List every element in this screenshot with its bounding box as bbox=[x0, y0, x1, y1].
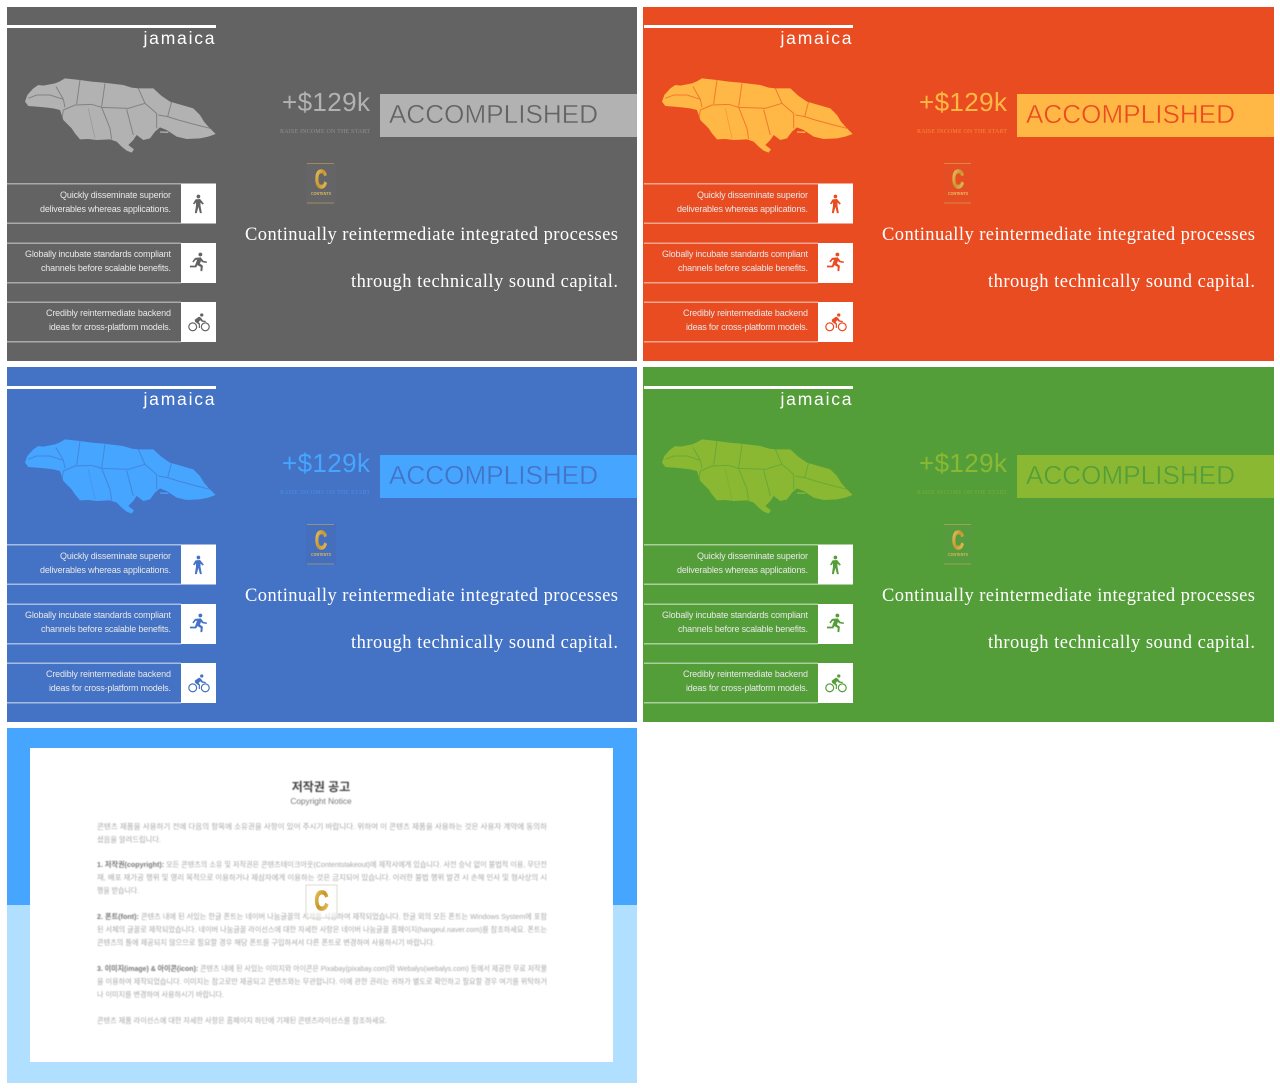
feature row: running bbox=[7, 604, 216, 644]
feature row: running: channels before scalable benefits. bbox=[678, 624, 808, 634]
icon: logo: C bbox=[952, 525, 964, 555]
text block: copyright clause bbox=[97, 860, 547, 895]
feature row: running bbox=[644, 604, 853, 644]
stat: +$129k: RAISE INCOME ON THE START bbox=[280, 490, 370, 496]
title: jamaica bbox=[644, 386, 853, 409]
banner: accomplished: ACCOMPLISHED bbox=[389, 460, 598, 490]
panel: green slide bbox=[643, 367, 1274, 722]
text block: font clause bbox=[97, 912, 547, 947]
feature row: cycling: ideas for cross-platform models. bbox=[686, 322, 808, 332]
heading: copyright notice: Copyright Notice bbox=[290, 796, 352, 806]
text block: image clause: 3. 이미지(image) & 아이콘(icon): 콘텐츠 내에 된 사있는 이미지와 아이콘은 Pixabay(pixabay.com)와 Webalys(webalys.com) 등에서 제공한 무료 저작물 bbox=[97, 964, 547, 973]
icon: logo: C bbox=[315, 164, 327, 194]
tagline: through technically sound capital. bbox=[351, 633, 618, 653]
map of Jamaica bbox=[662, 439, 853, 514]
panel: blue slide bbox=[7, 367, 637, 722]
map of Jamaica bbox=[25, 78, 216, 153]
icon: logo bbox=[306, 885, 337, 918]
panel: gray slide bbox=[7, 7, 637, 361]
title: jamaica bbox=[7, 25, 216, 48]
text block: intro: 콘텐츠 제품을 사용하기 전에 다음의 항목에 소유권을 사항이 있어 주시기 바랍니다. 위하여 이 콘텐츠 제품을 사용하는 것은 사용자 계약에 동의하 bbox=[97, 822, 547, 831]
stat: +$129k: RAISE INCOME ON THE START bbox=[917, 129, 1007, 135]
feature row: running bbox=[7, 242, 216, 284]
feature row: cycling: Credibly reintermediate backend bbox=[46, 308, 171, 318]
stat: +$129k: RAISE INCOME ON THE START bbox=[280, 129, 370, 135]
text block: intro bbox=[97, 822, 547, 844]
text block: copyright clause: 재, 배포 재가공 행위 및 영리 목적으로 이용하거나 제삼자에게 이용하는 것은 금지되어 있습니다. 이러한 불법 행위 발견 시 손해 민사 및 형사상의 시 bbox=[97, 873, 547, 882]
feature row: running: channels before scalable benefits. bbox=[41, 263, 171, 273]
stat: +$129k bbox=[280, 448, 371, 496]
feature row: cycling bbox=[644, 302, 853, 342]
tagline bbox=[882, 225, 1255, 292]
stat: +$129k: +$129k bbox=[282, 448, 371, 478]
feature row: walking bbox=[644, 544, 853, 585]
stat: +$129k: +$129k bbox=[919, 448, 1008, 478]
icon: logo: C bbox=[952, 164, 964, 194]
title: jamaica: jamaica bbox=[780, 28, 852, 48]
stat: +$129k bbox=[280, 87, 371, 135]
text block: image clause bbox=[97, 964, 547, 999]
banner: accomplished: ACCOMPLISHED bbox=[1026, 460, 1235, 490]
feature row: walking bbox=[7, 183, 216, 224]
feature row: walking: deliverables whereas applications. bbox=[677, 204, 808, 214]
text block: font clause: 된 서체의 글꼴로 제작되었습니다. 네이버 나눔글꼴 라이선스에 대한 자세한 사항은 네이버 나눔글꼴 홈페이지(hangeul.naver.com)를 참조하세요. 폰트는 bbox=[97, 925, 547, 934]
feature row: running: channels before scalable benefits. bbox=[41, 624, 171, 634]
tagline bbox=[245, 225, 618, 292]
text block: license note: 콘텐츠 제품 라이선스에 대한 자세한 사항은 홈페이지 하단에 기재된 콘텐츠라이선스를 참조하세요. bbox=[97, 1016, 387, 1025]
title: jamaica bbox=[644, 25, 853, 48]
feature row: walking: deliverables whereas applications. bbox=[40, 204, 171, 214]
feature row: cycling: ideas for cross-platform models. bbox=[49, 683, 171, 693]
text block: font clause: 2. 폰트(font): 콘텐츠 내에 된 서있는 한글 폰트는 네이버 나눔글꼴의 서체를 사용하여 제작되었습니다. 한글 외의 모든 폰트는 Windows System에 포함 bbox=[97, 912, 547, 921]
text block: copyright clause: 1. 저작권(copyright): 모든 콘텐츠의 소유 및 저작권은 콘텐츠테이크아웃(Contentstakeout)에 제작사에게 있습니다. 사전 승낙 없이 불법적 이용, 무단전 bbox=[97, 860, 547, 869]
heading: copyright notice bbox=[290, 779, 352, 806]
feature row: cycling: Credibly reintermediate backend bbox=[683, 308, 808, 318]
text block: font clause: 콘텐츠의 틀에 제공되지 않으므로 필요할 경우 해당 폰트를 구입하셔서 다른 폰트로 변경하여 사용하시기 바랍니다. bbox=[97, 938, 435, 947]
tagline: through technically sound capital. bbox=[351, 272, 618, 292]
banner: accomplished bbox=[380, 94, 637, 137]
text block: intro: 셨음을 알려드립니다. bbox=[97, 835, 161, 844]
stat: +$129k: +$129k bbox=[919, 87, 1008, 117]
feature row: walking: deliverables whereas applications. bbox=[677, 565, 808, 575]
text block: image clause: 을 이용하여 제작되었습니다. 이미지는 참고로만 제공되고 콘텐츠와는 무관합니다. 이에 관한 권리는 귀하가 별도로 확인하고 필요할 경우 여기를 위탁하거 bbox=[97, 977, 547, 986]
tagline: Continually reintermediate integrated processes bbox=[245, 586, 618, 606]
tagline: Continually reintermediate integrated processes bbox=[882, 586, 1255, 606]
map of Jamaica bbox=[662, 78, 853, 153]
icon: logo: CONTENTS bbox=[948, 552, 968, 557]
tagline: through technically sound capital. bbox=[988, 272, 1255, 292]
feature row: cycling: ideas for cross-platform models. bbox=[49, 322, 171, 332]
text block: copyright clause: 행을 받습니다. bbox=[97, 886, 139, 895]
stat: +$129k bbox=[917, 448, 1008, 496]
banner: accomplished: ACCOMPLISHED bbox=[389, 99, 598, 129]
feature row: cycling bbox=[7, 662, 216, 704]
title: jamaica: jamaica bbox=[142, 389, 215, 409]
feature row: cycling: Credibly reintermediate backend bbox=[683, 669, 808, 679]
banner: accomplished bbox=[380, 455, 637, 498]
feature row: cycling bbox=[7, 302, 216, 342]
feature row: running: Globally incubate standards compliant bbox=[25, 610, 171, 620]
title: jamaica bbox=[7, 386, 216, 409]
tagline: through technically sound capital. bbox=[988, 633, 1255, 653]
map of Jamaica bbox=[25, 439, 216, 514]
tagline bbox=[245, 586, 618, 653]
feature row: running: Globally incubate standards compliant bbox=[662, 249, 808, 259]
icon: logo bbox=[306, 524, 336, 565]
icon: logo: CONTENTS bbox=[311, 191, 331, 196]
feature row: walking: Quickly disseminate superior bbox=[60, 190, 171, 200]
icon: logo: CONTENTS bbox=[948, 191, 968, 196]
tagline: Continually reintermediate integrated processes bbox=[882, 225, 1255, 245]
icon: logo bbox=[306, 163, 336, 204]
feature row: cycling bbox=[644, 662, 853, 704]
banner: accomplished bbox=[1017, 455, 1274, 498]
title: jamaica: jamaica bbox=[780, 389, 852, 409]
stat: +$129k: +$129k bbox=[282, 87, 371, 117]
icon: logo: CONTENTS bbox=[311, 552, 331, 557]
feature row: walking: Quickly disseminate superior bbox=[697, 551, 808, 561]
feature row: running: Globally incubate standards compliant bbox=[662, 610, 808, 620]
feature row: walking bbox=[644, 183, 853, 224]
banner: accomplished bbox=[1017, 94, 1274, 137]
feature row: cycling: ideas for cross-platform models. bbox=[686, 683, 808, 693]
heading: copyright notice: 저작권 공고 bbox=[292, 779, 350, 794]
text block: image clause: 나 이미지를 변경하여 사용하시기 바랍니다. bbox=[97, 990, 224, 999]
feature row: walking: Quickly disseminate superior bbox=[60, 551, 171, 561]
icon: logo: C bbox=[314, 885, 328, 916]
feature row: cycling: Credibly reintermediate backend bbox=[46, 669, 171, 679]
title: jamaica: jamaica bbox=[142, 28, 215, 48]
panel: orange slide bbox=[643, 7, 1274, 361]
icon: logo bbox=[943, 163, 973, 204]
stat: +$129k bbox=[917, 87, 1008, 135]
stat: +$129k: RAISE INCOME ON THE START bbox=[917, 490, 1007, 496]
feature row: running: channels before scalable benefits. bbox=[678, 263, 808, 273]
feature row: walking: Quickly disseminate superior bbox=[697, 190, 808, 200]
feature row: walking bbox=[7, 544, 216, 585]
banner: accomplished: ACCOMPLISHED bbox=[1026, 99, 1235, 129]
icon: logo: C bbox=[315, 525, 327, 555]
feature row: running bbox=[644, 242, 853, 284]
feature row: running: Globally incubate standards compliant bbox=[25, 249, 171, 259]
tagline: Continually reintermediate integrated processes bbox=[245, 225, 618, 245]
tagline bbox=[882, 586, 1255, 653]
panel: copyright notice bbox=[7, 728, 637, 1083]
icon: logo bbox=[943, 524, 973, 565]
feature row: walking: deliverables whereas applications. bbox=[40, 565, 171, 575]
